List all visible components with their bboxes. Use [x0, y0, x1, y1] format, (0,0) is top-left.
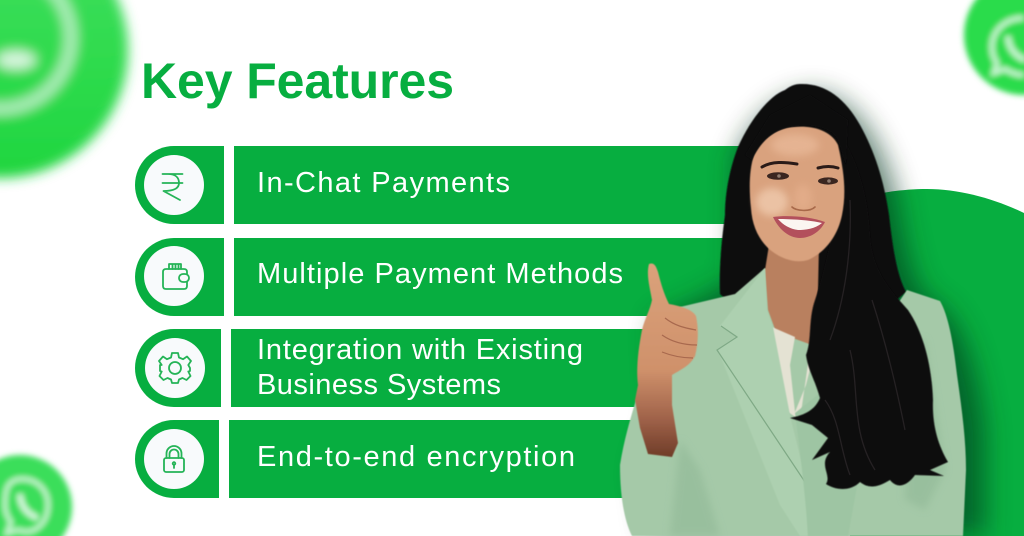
jacket shading	[670, 340, 945, 536]
label: Integration with Existing Business Systems: Integration with Existing	[257, 334, 583, 366]
icon: padlock	[164, 446, 184, 472]
background green blob	[850, 189, 1024, 536]
forehead hair overlap	[745, 95, 848, 165]
woman shadow	[640, 92, 985, 536]
icon: wallet	[163, 264, 189, 289]
icon: blurred WhatsApp logo top right	[964, 0, 1024, 95]
panel: In-Chat Payments	[135, 146, 744, 224]
label: Integration with Existing Business Systems: Business Systems	[257, 369, 501, 401]
face light	[756, 188, 788, 216]
label: End-to-end encryption: End-to-end encryption	[257, 441, 575, 473]
front hair fall	[790, 130, 948, 489]
illustration: woman giving thumbs up	[620, 84, 966, 536]
mouth	[773, 216, 825, 238]
title: Key Features	[141, 53, 454, 109]
icon: gear	[159, 353, 191, 383]
neck	[765, 245, 819, 345]
back hair	[720, 84, 906, 330]
label: Multiple Payment Methods: Multiple Payment Methods	[257, 258, 623, 290]
hair highlights	[825, 200, 905, 475]
panel: Multiple Payment Methods	[135, 238, 740, 316]
icon: blurred WhatsApp logo bottom left	[0, 455, 72, 536]
arm and hand	[635, 263, 698, 457]
right front panel	[795, 385, 860, 536]
nose	[792, 207, 815, 210]
brows	[762, 162, 838, 168]
panel: End-to-end encryption	[135, 420, 699, 498]
label: In-Chat Payments: In-Chat Payments	[257, 167, 510, 199]
icon: rupee	[162, 174, 182, 200]
shirt	[772, 327, 815, 420]
left lapel	[718, 268, 808, 536]
icon: blurred WhatsApp logo top left	[0, 0, 128, 178]
jacket body	[620, 268, 966, 536]
panel: Integration with Existing Business Systems	[135, 329, 701, 407]
finger lines	[662, 318, 697, 358]
face	[750, 127, 844, 261]
eyes	[767, 172, 838, 185]
